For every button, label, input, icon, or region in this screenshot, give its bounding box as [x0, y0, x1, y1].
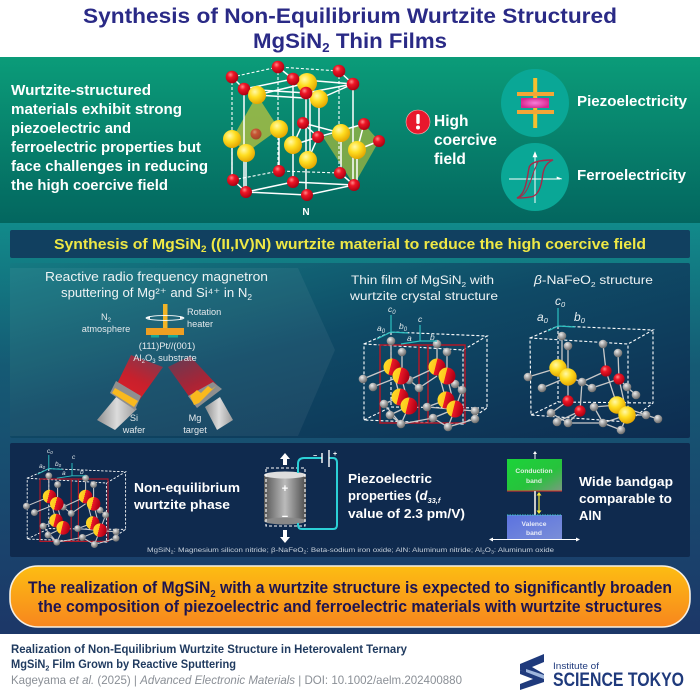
panel: lower background [0, 223, 700, 634]
logo text [553, 661, 684, 691]
text: abbreviations: 2 [171, 550, 174, 554]
labels: sputtering: wafer [122, 425, 145, 435]
labels: sputtering: Mg [189, 413, 201, 423]
text: non-equilibrium phase [133, 480, 240, 512]
text: sputtering description [45, 270, 268, 302]
labels: sputtering: (111)Pt//(001) [139, 340, 195, 351]
text: sputtering description: Reactive radio frequency magnetron [45, 270, 268, 284]
labels: sputtering: 3 [152, 359, 156, 365]
callout: conclusion banner: with a wurtzite structure is expected to significantly broaden [216, 578, 672, 597]
text: abbreviations: : Beta-sodium iron oxide; AlN: Aluminum nitride; Al [307, 547, 482, 554]
heading: synthesis band: 2 [201, 244, 207, 255]
heading: synthesis band: ((II,IV)N) wurtzite material to reduce the high coercive field [207, 236, 646, 253]
text: abbreviations: MgSiN [147, 547, 167, 554]
label: N atom: N [302, 207, 310, 218]
text: abbreviations: : Magnesium silicon nitride; β-NaFeO [174, 547, 304, 554]
text: non-equilibrium phase: wurtzite phase [133, 497, 230, 512]
labels: sputtering: Al [133, 352, 142, 363]
axis labels: small crystal: 0 [43, 465, 46, 470]
axis labels: beta: 0 [581, 316, 586, 325]
callout: conclusion banner: The realization of MgSiN [28, 578, 221, 597]
logo: Institute of Science Tokyo [520, 654, 684, 691]
axis labels: film: c [388, 304, 392, 314]
labels: sputtering: heater [187, 319, 213, 329]
Si wafer target [97, 381, 141, 430]
labels: sputtering: Si [130, 413, 138, 423]
callout: conclusion banner: the composition of piezoelectric and ferroelectric materials with wurtzite structures [38, 597, 662, 616]
axis labels: film: 0 [404, 327, 408, 333]
labels: sputtering: 2 [142, 359, 146, 365]
text: piezoelectric properties: 33,f [427, 496, 442, 505]
text: thin film heading: 2 [462, 280, 466, 289]
text: beta NaFeO2 heading: structure [596, 273, 653, 287]
footer: citation: Realization of Non-Equilibrium Wurtzite Structure in Heterovalent Ternary [11, 643, 408, 656]
labels: sputtering: O [145, 352, 152, 363]
axis labels: film: a [407, 333, 412, 343]
footer: citation: Film Grown by Reactive Sputtering [49, 658, 236, 671]
icon: piezoelectricity [501, 69, 569, 137]
text: piezoelectric properties: value of 2.3 pm/V) [348, 506, 465, 521]
axis labels: beta: b [574, 310, 581, 324]
labels: sputtering: substrate [156, 352, 197, 363]
label: ferroelectricity: Ferroelectricity [577, 167, 687, 184]
text: thin film heading: wurtzite crystal structure [349, 289, 498, 303]
text: high coercive field: High [434, 113, 468, 130]
text: abbreviations: : Aluminum oxide [494, 547, 554, 554]
labels: sputtering [82, 307, 221, 435]
chart: band diagram: band [526, 478, 542, 485]
text: abbreviations: O [485, 547, 491, 554]
axis labels: small crystal: c [47, 448, 50, 455]
text: wide bandgap: AlN [579, 508, 601, 523]
Mg target [188, 382, 233, 430]
axis labels: film: a [377, 323, 382, 333]
icon: piezoelectric cylinder circuit [264, 450, 337, 543]
axis labels: small crystal: b [55, 461, 59, 468]
chart: wurtzite crystal structure [223, 61, 385, 218]
text: wurtzite challenges: the high coercive field [11, 178, 168, 194]
axis labels: beta [537, 294, 586, 325]
heater [146, 304, 184, 338]
labels: sputtering: Rotation [187, 307, 221, 317]
panel: results [10, 443, 690, 557]
text: beta NaFeO2 heading: 2 [591, 280, 596, 289]
text: wide bandgap: comparable to [579, 491, 672, 506]
title [83, 4, 617, 55]
icon: piezoelectric cylinder circuit: + [282, 483, 288, 495]
axis labels: small crystal: 0 [59, 463, 62, 468]
heading: synthesis band [10, 230, 690, 258]
axis labels: film: b [430, 332, 435, 342]
text: beta NaFeO2 heading: β-NaFeO [534, 273, 585, 287]
text: wurtzite challenges [11, 83, 208, 194]
text: abbreviations: 2 [482, 550, 485, 554]
text: wide bandgap: Wide bandgap [579, 474, 673, 489]
title: Thin Films [330, 29, 447, 53]
axis labels: film: c [418, 314, 423, 324]
chart: MgSiN2 thin film crystal [359, 304, 487, 431]
text: sputtering description: sputtering of Mg²⁺ and Si⁴⁺ in N [61, 286, 239, 300]
label: piezoelectricity: Piezoelectricity [577, 93, 688, 110]
axis labels: small crystal: a [39, 463, 43, 470]
sputter beam: Si side [115, 355, 163, 402]
chart: non-equilibrium phase crystal [23, 448, 126, 548]
title: Synthesis of Non-Equilibrium Wurtzite Structured [83, 4, 617, 28]
labels: sputtering: N [101, 312, 108, 322]
footer: citation: Kageyama et al. (2025) | Advanced Electronic Materials | DOI: 10.1002/aelm.202400880 [11, 674, 462, 687]
text: thin film heading: with [466, 273, 494, 287]
axis labels: beta: 0 [544, 316, 549, 325]
arrow: process chevron [10, 268, 335, 436]
text: wurtzite challenges: face challenges in reducing [11, 159, 208, 175]
icon: piezoelectric cylinder circuit: + [333, 451, 337, 458]
axis labels: small crystal: a [62, 470, 66, 477]
text: wurtzite challenges: ferroelectric properties but [11, 140, 201, 156]
axis labels: small crystal: b [80, 469, 84, 476]
text: wurtzite challenges: piezoelectric and [11, 121, 131, 137]
icon: ferroelectricity [501, 143, 569, 211]
callout: conclusion banner: 2 [210, 589, 216, 600]
axis labels: beta: 0 [561, 300, 566, 309]
logo mark [520, 654, 544, 690]
axis labels: film: 0 [392, 310, 396, 316]
axis labels: beta: c [555, 294, 561, 308]
icon: warning [406, 110, 430, 134]
axis labels: small crystal: 0 [50, 450, 53, 455]
icon: piezoelectric cylinder circuit: − [313, 453, 317, 460]
chart: beta NaFeO2 crystal [524, 294, 662, 434]
axis labels: film: b [399, 321, 404, 331]
axis labels: small crystal [39, 448, 84, 477]
text: high coercive field: coercive [434, 132, 497, 149]
text: thin film heading: Thin film of MgSiN [351, 273, 451, 287]
footer: citation [11, 643, 462, 687]
chart: band diagram: Valence [522, 521, 547, 528]
axis labels: film [377, 304, 435, 343]
heading: synthesis band: Synthesis of MgSiN [54, 236, 196, 253]
text: sputtering description: 2 [247, 293, 253, 302]
text: high coercive field [434, 113, 497, 168]
logo text: Institute of [553, 661, 599, 672]
text: abbreviations: 3 [491, 550, 495, 554]
footer: citation: 2 [45, 664, 49, 672]
text: high coercive field: field [434, 151, 466, 168]
footer: citation: MgSiN [11, 658, 47, 671]
axis labels: beta: a [537, 310, 544, 324]
axis labels: film: 0 [382, 329, 386, 335]
chart: band diagram: band [526, 530, 542, 537]
text: piezoelectric properties: Piezoelectric [348, 471, 432, 486]
labels: sputtering: 2 [108, 318, 112, 324]
text: piezoelectric properties: properties (d [348, 488, 427, 503]
labels: sputtering: atmosphere [82, 324, 130, 334]
text: thin film heading [349, 273, 498, 303]
text: wide bandgap [579, 474, 673, 523]
text: abbreviations: 2 [304, 550, 307, 554]
title: MgSiN [253, 29, 320, 53]
chart: band diagram [489, 451, 580, 542]
panel: wurtzite properties [0, 57, 700, 223]
text: non-equilibrium phase: Non-equilibrium [134, 480, 240, 495]
text: wurtzite challenges: Wurtzite-structured [11, 83, 151, 99]
sputter beam: Mg side [168, 356, 217, 402]
panel: synthesis methods [10, 263, 690, 438]
text: wurtzite challenges: materials exhibit strong [11, 102, 182, 118]
axis labels: small crystal: c [72, 454, 76, 461]
title: 2 [322, 40, 330, 55]
callout: conclusion banner [10, 566, 690, 627]
labels: sputtering: target [183, 425, 207, 435]
text: piezoelectric properties [348, 471, 465, 521]
chart: band diagram: Conduction [515, 468, 553, 475]
icon: piezoelectric cylinder circuit: − [282, 511, 288, 523]
chart: sputtering diagram [82, 304, 233, 435]
